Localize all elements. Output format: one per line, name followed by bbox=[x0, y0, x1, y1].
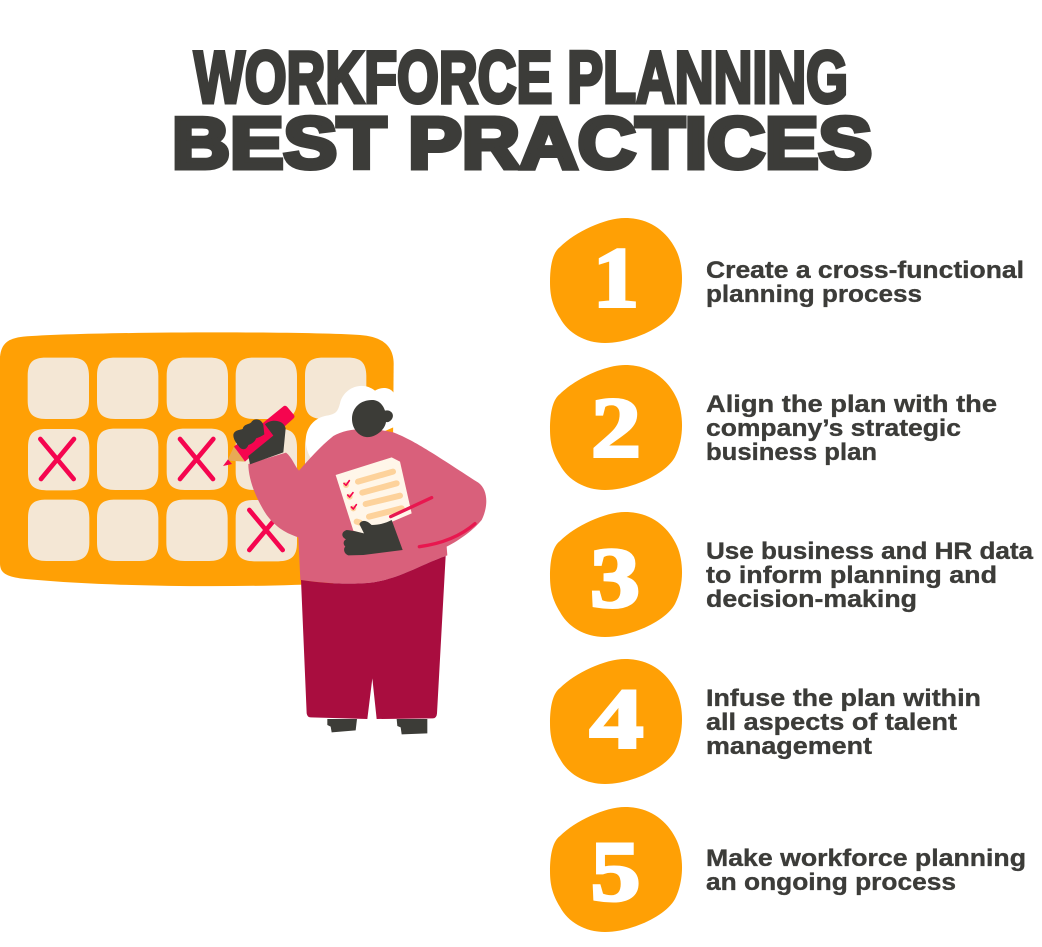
step 2 bbox=[550, 365, 997, 490]
calendar board bbox=[0, 332, 394, 586]
step 4 text bbox=[706, 685, 981, 760]
badge 5: 5 bbox=[590, 823, 640, 919]
step 1 text: Create a cross-functional bbox=[706, 257, 1024, 284]
step 3 bbox=[550, 512, 1034, 637]
step 3 text: to inform planning and bbox=[706, 562, 997, 589]
badge 1: 1 bbox=[593, 230, 639, 326]
badge 4 bbox=[550, 659, 682, 784]
step 5 text: Make workforce planning bbox=[706, 845, 1026, 872]
fingers bbox=[233, 419, 264, 449]
pencil tip bbox=[227, 447, 245, 462]
step 5 bbox=[550, 807, 1026, 932]
step 1 text: planning process bbox=[706, 281, 922, 308]
calendar cross marks bbox=[40, 439, 283, 550]
badge 4: 4 bbox=[590, 670, 644, 766]
step 4 text: Infuse the plan within bbox=[706, 685, 981, 712]
step 5 text bbox=[706, 845, 1026, 896]
sleeve fold lines bbox=[391, 498, 475, 547]
step 1 bbox=[550, 218, 1024, 343]
palm bbox=[248, 421, 286, 464]
pencil body bbox=[234, 406, 295, 462]
badge 5 bbox=[550, 807, 682, 932]
step 2 text bbox=[706, 391, 997, 466]
step 2 text: Align the plan with the bbox=[706, 391, 997, 418]
badge 3: 3 bbox=[590, 530, 640, 626]
title bbox=[172, 38, 872, 184]
step 2 text: company’s strategic bbox=[706, 415, 961, 442]
step 4 text: all aspects of talent bbox=[706, 709, 957, 736]
step 2 text: business plan bbox=[706, 439, 877, 466]
step 5 text: an ongoing process bbox=[706, 869, 956, 896]
badge 3 bbox=[550, 512, 682, 637]
step 3 text: decision-making bbox=[706, 586, 917, 613]
step 3 text: Use business and HR data bbox=[706, 538, 1034, 565]
calendar cells bbox=[28, 358, 366, 561]
trousers bbox=[301, 556, 446, 719]
lower hand bbox=[342, 520, 403, 555]
raised hand with pencil bbox=[223, 406, 295, 466]
step 1 text bbox=[706, 257, 1024, 308]
sweater bbox=[248, 429, 486, 584]
badge 2 bbox=[550, 365, 682, 490]
illustration: calendar and person bbox=[0, 332, 486, 734]
badge 2: 2 bbox=[591, 380, 641, 476]
head bbox=[352, 400, 393, 437]
clipboard paper bbox=[336, 457, 412, 534]
shoes bbox=[327, 719, 427, 734]
step 4 bbox=[550, 659, 981, 784]
badge 1 bbox=[550, 218, 682, 343]
hair bbox=[306, 386, 395, 460]
step 4 text: management bbox=[706, 733, 872, 760]
title: BEST PRACTICES bbox=[172, 104, 872, 184]
step 3 text bbox=[706, 538, 1034, 613]
